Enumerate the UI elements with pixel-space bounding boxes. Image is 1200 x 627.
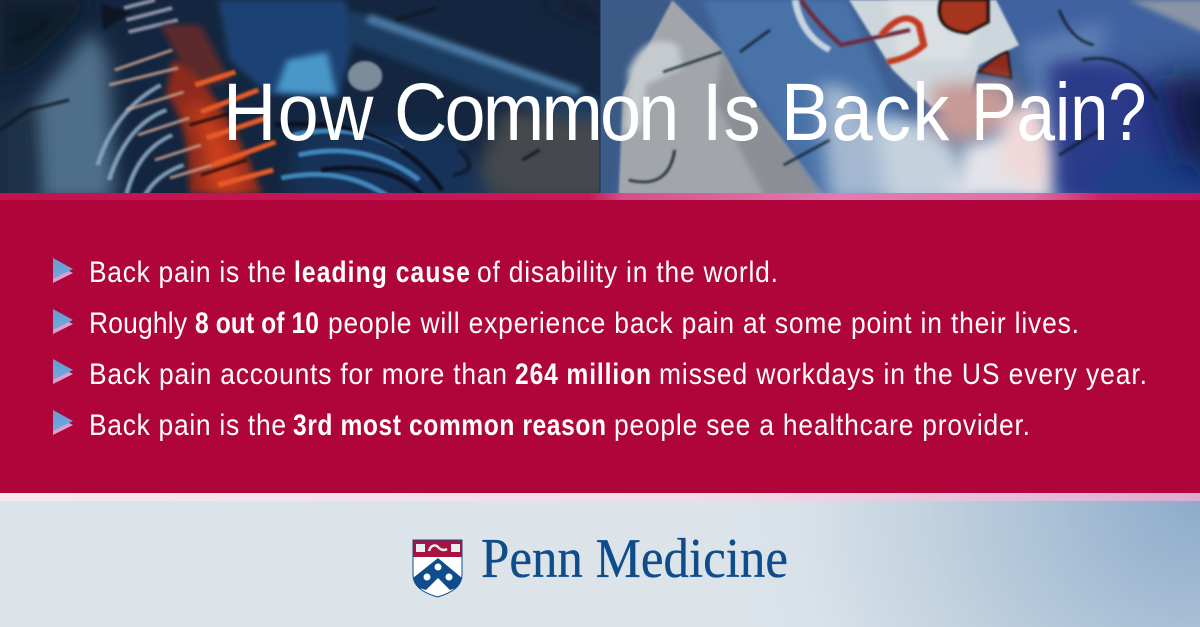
bullet 3 xyxy=(53,356,1147,391)
spine xyxy=(109,0,276,193)
title: Common xyxy=(394,65,679,158)
icon: Penn shield xyxy=(413,540,462,597)
bullet 4: Back pain is the xyxy=(89,407,286,441)
main crimson panel xyxy=(0,200,1200,493)
title: Back xyxy=(781,65,950,158)
puzzle outlines xyxy=(0,8,540,175)
bullet 1 xyxy=(53,254,778,289)
bullet 3: Back pain accounts for more than xyxy=(89,356,507,390)
right panel: puzzle pieces and anatomy xyxy=(600,0,1200,200)
bullet 3: missed workdays in the US every year. xyxy=(659,356,1147,390)
bullet 4 xyxy=(53,407,1030,442)
lower pale band xyxy=(0,493,1200,501)
bullet 1: leading cause xyxy=(294,255,470,289)
title xyxy=(223,65,1147,158)
bullet 2: Roughly xyxy=(89,305,188,339)
icon: arrow 3 xyxy=(53,359,73,384)
top translucent band xyxy=(0,193,1200,200)
footer background xyxy=(0,501,1200,627)
title: Is xyxy=(702,65,761,158)
icon: arrow 2 xyxy=(53,309,73,334)
title: How xyxy=(223,65,374,158)
hero image: spine and puzzle pieces xyxy=(0,0,1200,200)
bullet 3: 264 million xyxy=(515,357,651,391)
title: Pain? xyxy=(971,66,1147,158)
bullet 4: 3rd most common reason xyxy=(293,408,606,442)
logo: Penn Medicine xyxy=(412,538,786,598)
wordmark: Penn Medicine xyxy=(481,528,788,590)
bullet 2: 8 out of 10 xyxy=(195,306,319,340)
ribs xyxy=(98,85,184,198)
icon: arrow 4 xyxy=(53,410,73,435)
bullet 2: people will experience back pain at some point in their lives. xyxy=(328,305,1079,339)
bullet 1: of disability in the world. xyxy=(477,254,778,288)
left panel: spine, rib cage and puzzle xyxy=(0,0,600,193)
bullet 1: Back pain is the xyxy=(89,254,286,288)
icon: arrow 1 xyxy=(53,258,73,283)
bullet 4: people see a healthcare provider. xyxy=(614,407,1030,441)
